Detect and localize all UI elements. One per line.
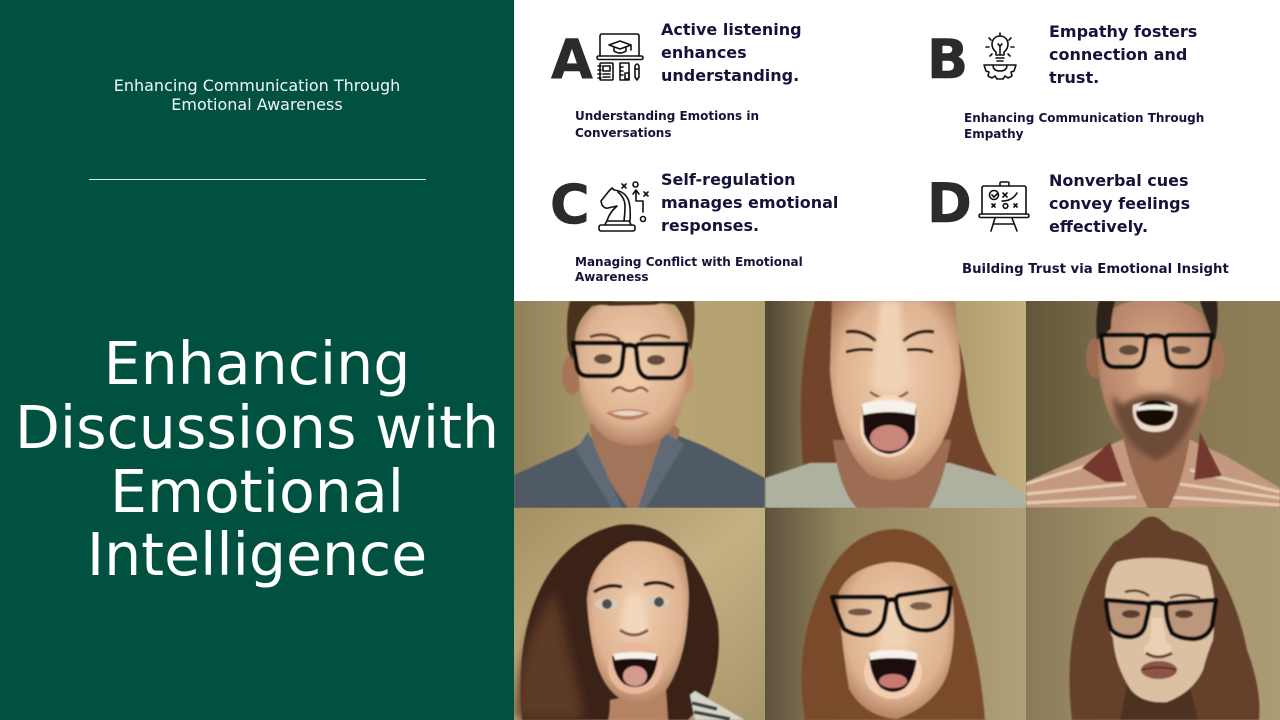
icon: lightbulb and gear (984, 33, 1016, 79)
key point A: Active listening (661, 20, 802, 39)
subheading A: Conversations (575, 126, 672, 140)
key point B: connection and (1049, 45, 1187, 64)
subheading C: Managing Conflict with Emotional (575, 255, 803, 269)
key point B: Empathy fosters (1049, 22, 1197, 41)
subheading D: Building Trust via Emotional Insight (962, 262, 1229, 277)
photo: woman with glasses shouting (765, 508, 1026, 720)
panel: card C (550, 170, 838, 284)
letter D: D (927, 172, 972, 235)
icon: chess knight strategy (599, 182, 648, 231)
title: Enhancing (104, 330, 410, 398)
letter B: B (927, 28, 968, 91)
panel: card B (927, 22, 1204, 141)
panel: card A (551, 20, 802, 140)
title: Emotional (110, 458, 404, 526)
subheading C: Awareness (575, 270, 648, 284)
photo: woman with dark hair, shocked (514, 508, 765, 720)
subheading B: Enhancing Communication Through (964, 111, 1204, 125)
title: Discussions with (15, 394, 499, 462)
photo: woman screaming with eyes shut (765, 301, 1026, 508)
icon: tactics whiteboard (979, 182, 1029, 231)
key point C: Self-regulation (661, 170, 796, 189)
key point C: responses. (661, 216, 759, 235)
letter A: A (551, 28, 593, 91)
photo: man with glasses shouting (1026, 299, 1280, 508)
key point D: effectively. (1049, 217, 1148, 236)
icon: laptop and study tools (597, 34, 643, 80)
key point A: enhances (661, 43, 747, 62)
subheading B: Empathy (964, 127, 1024, 141)
photo: woman with glasses, pouting (1026, 508, 1280, 720)
letter C: C (550, 173, 590, 236)
key point D: convey feelings (1049, 194, 1190, 213)
key point C: manages emotional (661, 193, 838, 212)
subtitle: Enhancing Communication Through (114, 76, 400, 95)
subheading A: Understanding Emotions in (575, 109, 759, 123)
key point D: Nonverbal cues (1049, 171, 1188, 190)
key point A: understanding. (661, 66, 799, 85)
key point B: trust. (1049, 68, 1099, 87)
title: Intelligence (87, 521, 427, 589)
photo: man with glasses, worried (514, 299, 765, 508)
subtitle: Emotional Awareness (171, 95, 343, 114)
panel: card D (927, 171, 1229, 277)
panel: green title panel (0, 0, 514, 720)
